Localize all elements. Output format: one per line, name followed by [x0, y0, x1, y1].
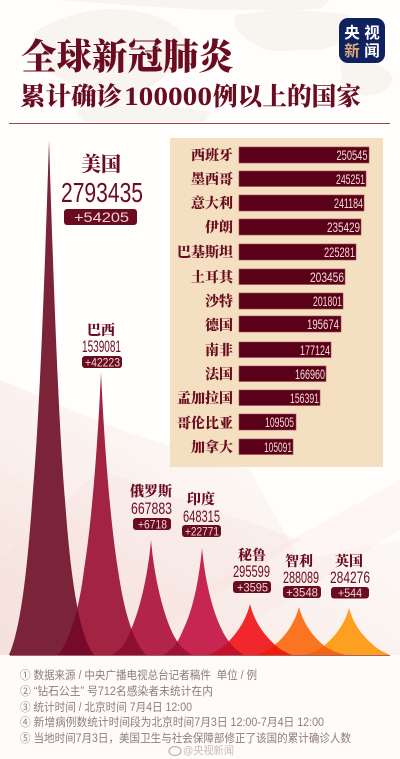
label: 俄罗斯 — [130, 483, 172, 532]
subtitle — [20, 82, 361, 111]
row: 巴基斯坦: 巴基斯坦 — [177, 244, 233, 261]
row: 孟加拉国 — [177, 390, 320, 407]
row: 意大利 — [191, 195, 364, 212]
subtitle: 例以上的国家 — [213, 82, 361, 111]
ranking panel — [170, 138, 383, 467]
label: 俄罗斯: 667883 — [131, 499, 172, 518]
label: 印度 — [182, 491, 221, 538]
label: 秘鲁: 295599 — [233, 562, 270, 581]
row: 加拿大: 105091 — [264, 439, 292, 455]
row: 意大利: 241184 — [334, 195, 363, 211]
logo: CCTV news: 央 — [344, 24, 360, 42]
row: 法国: 166960 — [295, 366, 325, 382]
spike: 秘鲁 — [208, 604, 292, 655]
world map backdrop — [33, 0, 393, 122]
row: 德国: 德国 — [205, 317, 233, 334]
row: 哥伦比亚: 哥伦比亚 — [177, 415, 233, 432]
footnotes: ④ 新增病例数统计时间段为北京时间7月3日 12:00-7月4日 12:00 — [20, 715, 324, 729]
label: 巴西 — [82, 322, 122, 370]
logo: CCTV news: 新 — [344, 41, 360, 60]
spike: 印度 — [163, 548, 244, 655]
row: 西班牙: 250545 — [336, 147, 368, 163]
row: 伊朗: 235429 — [327, 219, 360, 235]
label: 智利: 智利 — [285, 553, 313, 570]
row: 德国 — [205, 316, 341, 334]
row: 哥伦比亚 — [177, 414, 296, 432]
row: 加拿大 — [191, 439, 293, 456]
row: 意大利: 意大利 — [191, 195, 233, 212]
label: 俄罗斯: +6718 — [138, 518, 167, 532]
logo: CCTV news — [339, 18, 385, 63]
footnotes: ② “钻石公主” 号712名感染者未统计在内 — [20, 684, 213, 698]
row: 西班牙: 西班牙 — [191, 147, 233, 164]
row: 墨西哥 — [191, 171, 366, 188]
row: 南非 — [205, 342, 331, 359]
label: 智利: +3548 — [286, 586, 318, 600]
header — [20, 37, 361, 111]
row: 沙特: 201801 — [313, 293, 342, 309]
label: 秘鲁 — [233, 547, 271, 594]
spike chart — [9, 140, 390, 655]
spike: 美国 — [9, 140, 94, 655]
label: 智利: 288089 — [283, 568, 319, 587]
label: 印度: 648315 — [183, 507, 220, 526]
label: 英国 — [330, 553, 370, 600]
row: 西班牙 — [191, 147, 369, 164]
row: 墨西哥: 245251 — [336, 171, 365, 187]
spike overlaps — [58, 608, 346, 655]
label: 印度: +22771 — [185, 524, 219, 538]
label: 美国: +54205 — [74, 209, 129, 225]
subtitle: 100000 — [124, 82, 212, 111]
row: 墨西哥: 墨西哥 — [191, 171, 233, 188]
row: 沙特: 沙特 — [205, 293, 233, 310]
label: 秘鲁: +3595 — [237, 580, 268, 594]
row: 巴基斯坦 — [177, 244, 356, 261]
logo: CCTV news: 闻 — [364, 42, 380, 60]
row: 加拿大: 加拿大 — [191, 439, 233, 456]
label: 巴西: 1539081 — [82, 337, 121, 356]
label: 巴西: 巴西 — [87, 322, 115, 339]
row: 土耳其: 土耳其 — [191, 269, 236, 286]
label: 印度: 印度 — [187, 491, 215, 508]
row: 沙特 — [205, 293, 343, 310]
logo: CCTV news: 视 — [364, 24, 380, 42]
footnotes: ① 数据来源 / 中央广播电视总台记者稿件 单位 / 例 — [20, 668, 257, 682]
label: 英国: +544 — [338, 586, 362, 600]
subtitle: 累计确诊 — [20, 82, 122, 111]
row: 德国: 195674 — [307, 316, 339, 332]
row: 伊朗 — [205, 219, 361, 236]
label: 巴西: +42223 — [85, 356, 120, 370]
watermark: weibo — [169, 743, 234, 757]
spike: 智利 — [255, 607, 346, 655]
row: 土耳其: 203456 — [310, 269, 344, 285]
footnotes: ③ 统计时间 / 北京时间 7月4日 12:00 — [20, 700, 192, 714]
row: 哥伦比亚: 109505 — [265, 414, 294, 430]
label: 美国: 2793435 — [61, 177, 143, 208]
label: 美国 — [61, 152, 143, 225]
row: 孟加拉国: 156391 — [290, 390, 319, 406]
footnotes: ⑤ 当地时间7月3日，美国卫生与社会保障部修正了该国的累计确诊人数 — [20, 731, 351, 745]
watermark: weibo: @央视新闻 — [183, 743, 234, 757]
row: 伊朗: 伊朗 — [205, 219, 233, 236]
spike: 巴西 — [58, 372, 146, 655]
label: 英国: 284276 — [330, 568, 370, 587]
spike: 英国 — [304, 608, 390, 655]
row: 南非: 177124 — [300, 342, 330, 358]
title: 全球新冠肺炎 — [21, 37, 238, 77]
row: 孟加拉国: 孟加拉国 — [177, 390, 233, 407]
label: 英国: 英国 — [335, 553, 363, 570]
row: 法国 — [205, 366, 326, 383]
row: 土耳其 — [191, 269, 345, 286]
spike: 俄罗斯 — [112, 540, 192, 655]
label: 秘鲁: 秘鲁 — [238, 547, 266, 564]
row: 法国: 法国 — [205, 366, 233, 383]
footnotes — [20, 668, 351, 745]
row: 巴基斯坦: 225281 — [324, 244, 355, 260]
label: 智利 — [283, 553, 321, 600]
label: 美国: 美国 — [81, 152, 121, 176]
label: 俄罗斯: 俄罗斯 — [130, 483, 172, 500]
row: 南非: 南非 — [205, 342, 233, 359]
